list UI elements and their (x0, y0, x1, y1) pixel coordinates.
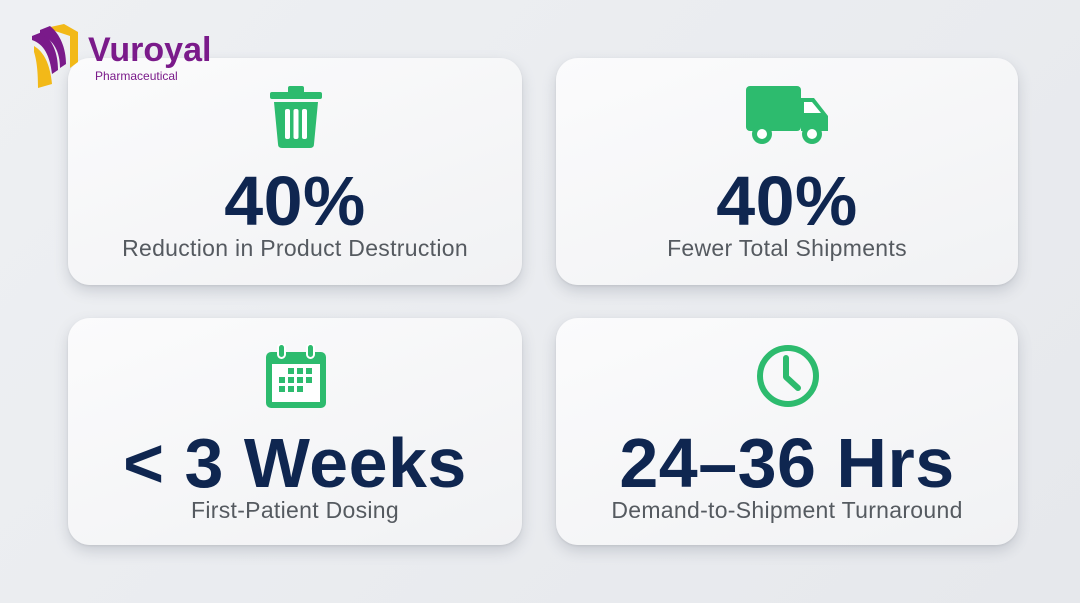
logo: Pharmaceutical (95, 69, 178, 83)
label: Reduction in Product Destruction (122, 235, 468, 261)
panel: shipments (556, 58, 1018, 285)
stat: 24-36 hrs: 24–36 Hrs (619, 424, 955, 502)
label: Demand-to-Shipment Turnaround (611, 497, 963, 523)
logo (32, 24, 211, 88)
icon: logo mark (32, 24, 78, 88)
panel: product destruction (68, 58, 522, 285)
label: First-Patient Dosing (191, 497, 399, 523)
stat: < 3 weeks: < 3 Weeks (123, 424, 467, 502)
label: Fewer Total Shipments (667, 235, 907, 261)
icon: calendar (266, 345, 326, 408)
stat: 40%: 40% (716, 162, 858, 240)
panel: first-patient dosing (68, 318, 522, 545)
stat: 40%: 40% (224, 162, 366, 240)
icon: truck (746, 86, 828, 144)
panel: turnaround (556, 318, 1018, 545)
icon: clock (757, 345, 819, 407)
logo text: Vuroyal (88, 31, 211, 69)
icon: trash (270, 86, 322, 148)
